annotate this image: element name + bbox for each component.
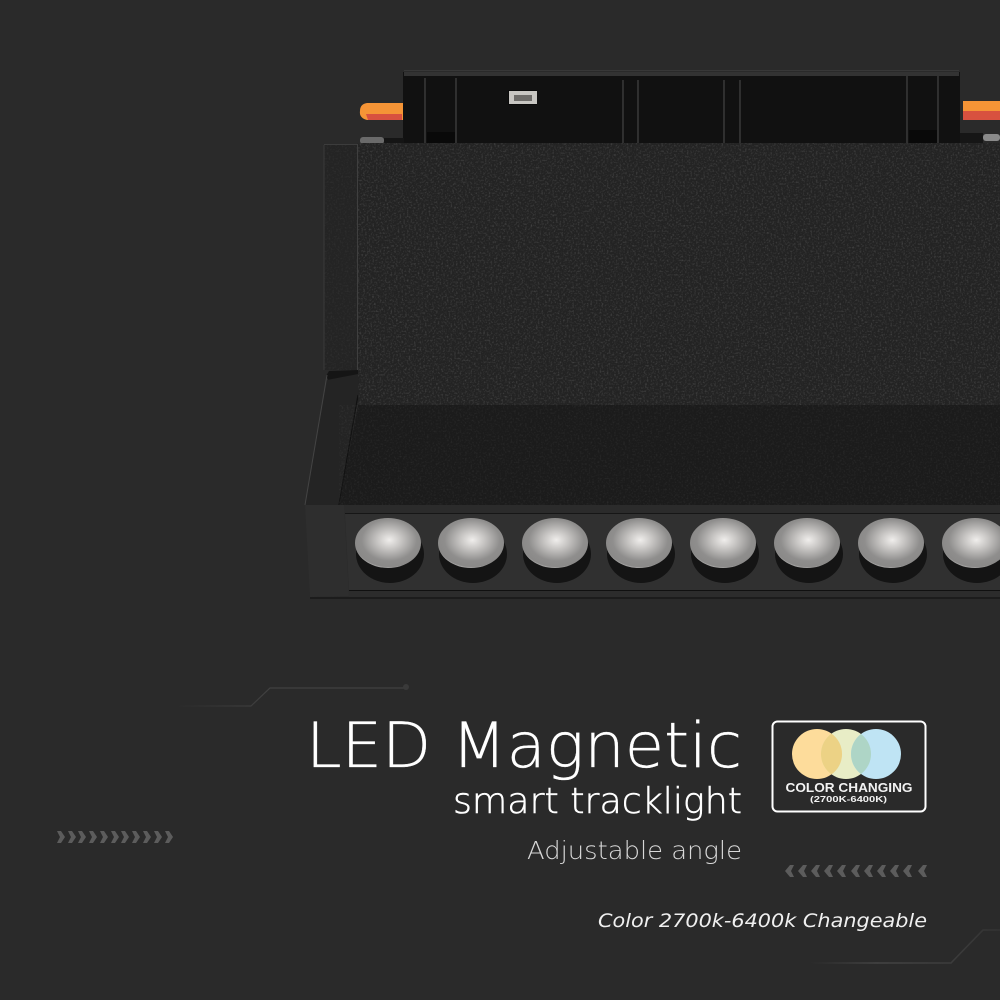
badge label: COLOR CHANGING <box>786 781 912 795</box>
circuit line: top left <box>175 684 409 706</box>
title: LED Magnetic <box>306 709 742 782</box>
left orange clip <box>360 103 404 144</box>
subtitle: smart tracklight <box>453 781 742 822</box>
product: magnetic LED tracklight <box>305 70 1000 598</box>
lens bar <box>345 514 1000 590</box>
tagline: Adjustable angle <box>527 836 742 865</box>
head top face <box>339 405 1000 505</box>
body side strip <box>324 144 358 370</box>
badge range: (2700K-6400K) <box>810 794 887 804</box>
lenses <box>355 518 1000 583</box>
head left corner face <box>305 505 349 597</box>
head front rim <box>339 505 1000 513</box>
chevrons: left <box>57 831 173 843</box>
circuit line: bottom right <box>810 930 1000 963</box>
caption: Color 2700k-6400k Changeable <box>598 910 927 932</box>
head notch <box>326 370 358 400</box>
right orange clip <box>960 101 1000 143</box>
badge: color changing <box>772 722 926 812</box>
chevrons: right <box>785 865 927 877</box>
bottom edge <box>349 591 1000 597</box>
track adapter <box>403 70 960 144</box>
icon: three overlapping colour circles <box>792 729 901 779</box>
body main face <box>357 143 1000 405</box>
head left angled face <box>305 374 358 505</box>
